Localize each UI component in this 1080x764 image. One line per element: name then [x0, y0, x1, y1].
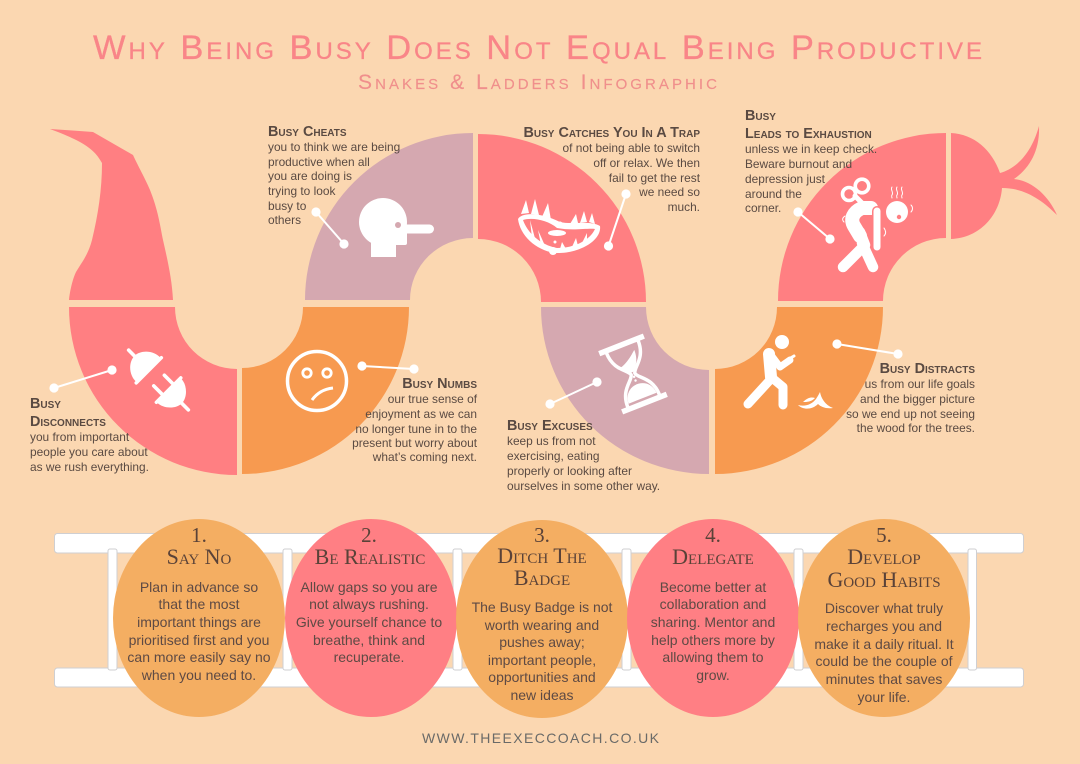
number: 5. [876, 523, 892, 547]
body text: our true sense of [388, 392, 478, 406]
body text [30, 430, 149, 474]
body text: prioritised first and you [129, 632, 269, 648]
body text: Plan in advance so [140, 579, 258, 595]
segment [242, 307, 409, 474]
body text: as we rush everything. [30, 460, 149, 474]
heading: Be Realistic [315, 544, 425, 569]
heading: Badge [514, 565, 570, 590]
panel: busy cheats [268, 124, 473, 300]
panel: busy numbs [242, 307, 478, 474]
heading: Say No [167, 544, 232, 569]
body text: fail to get the rest [609, 171, 701, 185]
body text: depression just [745, 172, 826, 186]
body text: Discover what truly [825, 600, 943, 616]
body text: enjoyment as we can [365, 407, 477, 421]
body text: that the most [159, 596, 240, 612]
body text: grow. [696, 667, 730, 683]
heading [827, 544, 941, 592]
snake tail [50, 129, 173, 300]
number: 1. [191, 523, 207, 547]
panel: busy disconnects [30, 307, 237, 475]
body text: important things are [137, 614, 261, 630]
heading: Busy [745, 108, 776, 124]
body text: when you need to. [141, 667, 256, 683]
snake head with forked tongue [951, 126, 1057, 239]
icon: sad face [288, 352, 346, 410]
body text: what’s coming next. [372, 450, 477, 464]
body text: The Busy Badge is not [472, 599, 613, 615]
heading: Disconnects [30, 414, 106, 430]
body text: you are doing is [268, 169, 352, 183]
heading: Busy Distracts [880, 361, 975, 377]
body text: recharges you and [826, 618, 942, 634]
body text [507, 434, 660, 493]
body text [745, 142, 877, 215]
oval: delegate [627, 519, 799, 717]
body text: breathe, think and [313, 632, 425, 648]
segment [69, 307, 237, 475]
heading: Busy Numbs [402, 376, 477, 392]
body text: sharing. Mentor and [651, 614, 775, 630]
icon: walking man with phone [748, 335, 794, 405]
heading: Leads to Exhaustion [745, 126, 872, 142]
connector [794, 208, 834, 243]
oval: be realistic [285, 519, 457, 717]
segment [305, 133, 473, 300]
body text: others [268, 213, 301, 227]
body text: much. [668, 200, 700, 214]
panel: busy catches you in a trap [478, 125, 701, 302]
body text: we need so [638, 185, 700, 199]
body text: busy to [268, 199, 307, 213]
body text: Allow gaps so you are [301, 579, 438, 595]
heading: Good Habits [827, 567, 941, 592]
heading: Busy Excuses [507, 418, 593, 434]
heading: Busy [30, 396, 61, 412]
body text: recuperate. [334, 649, 404, 665]
segment [778, 133, 946, 301]
body text: Become better at [660, 579, 766, 595]
heading [745, 108, 872, 142]
body text [846, 377, 975, 435]
oval: develop good habits [798, 519, 970, 717]
body text: corner. [745, 201, 781, 215]
body text: not always rushing. [309, 596, 429, 612]
body text [472, 599, 613, 703]
connector [833, 340, 902, 358]
body text [352, 392, 478, 464]
panel: busy excuses [507, 307, 709, 493]
subtitle: Snakes & Ladders Infographic [358, 71, 717, 94]
body text: opportunities and [488, 669, 596, 685]
body text: allowing them to [662, 649, 764, 665]
body text: new ideas [510, 687, 574, 703]
body text: the wood for the trees. [857, 421, 975, 435]
body text: important people, [488, 652, 596, 668]
oval: say no [113, 519, 285, 717]
body text: worth wearing and [484, 617, 599, 633]
body text: people you care about [30, 445, 148, 459]
title: Why Being Busy Does Not Equal Being Productive [93, 29, 982, 67]
body text: exercising, eating [507, 449, 600, 463]
body text: trying to look [268, 184, 335, 198]
connector [50, 366, 116, 392]
body text: around the [745, 187, 802, 201]
segment [541, 307, 709, 474]
body text: you from important [30, 430, 130, 444]
icon: pinocchio head [359, 198, 434, 257]
heading [30, 396, 106, 430]
connector [358, 362, 418, 373]
heading [497, 543, 587, 590]
body text: Give yourself chance to [296, 614, 442, 630]
heading: Busy Cheats [268, 124, 347, 140]
body text: and the bigger picture [860, 392, 975, 406]
body text [268, 140, 400, 227]
body text: so we end up not seeing [846, 407, 975, 421]
heading: Delegate [672, 544, 754, 569]
body text: unless we in keep check. [745, 142, 877, 156]
icon: bear trap [518, 199, 600, 255]
body text: no longer tune in to the [355, 422, 477, 436]
heading: Ditch The [497, 543, 587, 568]
body text: pushes away; [499, 634, 585, 650]
body text: make it a daily ritual. It [814, 636, 954, 652]
panel: busy leads to exhaustion [745, 108, 946, 301]
body text [562, 141, 701, 214]
body text: Beware burnout and [745, 157, 852, 171]
number: 3. [534, 523, 550, 547]
body text: of not being able to switch [562, 141, 700, 155]
icon: plug and socket [114, 335, 203, 425]
body text: keep us from not [507, 434, 596, 448]
heading: Busy Catches You In A Trap [524, 125, 700, 141]
body text: properly or looking after [507, 464, 632, 478]
body text: collaboration and [660, 596, 766, 612]
number: 2. [361, 523, 377, 547]
segment [715, 307, 883, 474]
segment [478, 134, 646, 302]
icon: hourglass [598, 334, 668, 414]
body text: can more easily say no [127, 649, 271, 665]
oval: ditch the badge [456, 520, 628, 718]
body text: productive when all [268, 155, 370, 169]
ladder [54, 534, 1024, 687]
body text [296, 579, 442, 665]
footer url: WWW.THEEXECCOACH.CO.UK [422, 730, 660, 746]
body text [651, 579, 775, 683]
body text: minutes that saves [826, 671, 942, 687]
body text: you to think we are being [268, 140, 400, 154]
connector [546, 378, 601, 408]
body text: off or relax. We then [593, 156, 700, 170]
body text [814, 600, 954, 705]
panel: busy distracts [715, 307, 975, 474]
body text [127, 579, 271, 683]
body text: your life. [858, 689, 910, 705]
body text: ourselves in some other way. [507, 479, 660, 493]
icon: exhausted wind-up man [842, 179, 912, 267]
body text: could be the couple of [816, 653, 953, 669]
connector [312, 208, 348, 248]
body text: present but worry about [352, 436, 478, 450]
icon: banana peel [798, 392, 833, 409]
connector [605, 190, 630, 250]
body text: us from our life goals [865, 377, 975, 391]
number: 4. [705, 523, 721, 547]
body text: help others more by [651, 632, 775, 648]
heading: Develop [847, 544, 921, 569]
